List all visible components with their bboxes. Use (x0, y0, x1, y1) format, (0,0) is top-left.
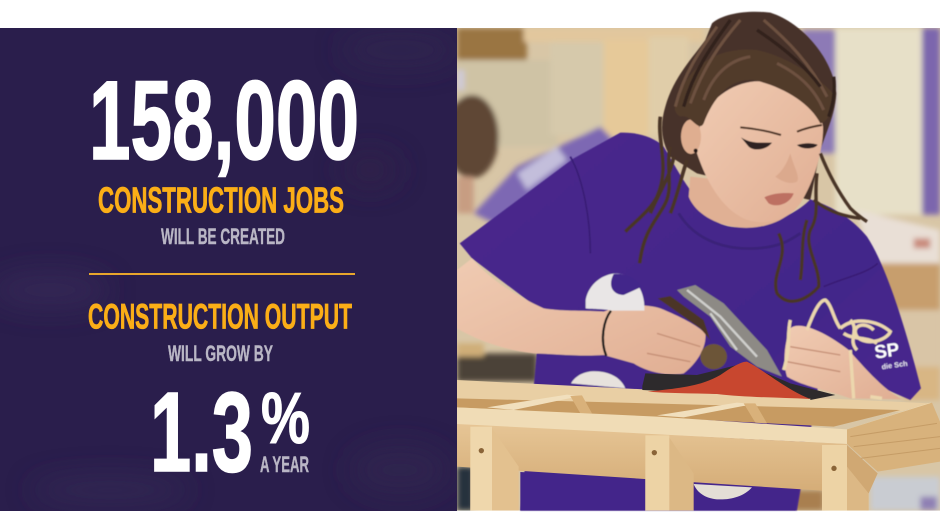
hair strands right (776, 153, 867, 301)
big number: 1.3: 1.3 (150, 369, 253, 495)
figure: woman in purple T-shirt (457, 12, 921, 511)
hand plane body (658, 285, 782, 377)
right hand (785, 326, 902, 399)
plane sole and red side plate (642, 362, 835, 400)
panel: purple overlay (0, 28, 460, 511)
leg three (847, 467, 869, 510)
percent sign: % (261, 379, 310, 459)
left arm (457, 258, 706, 374)
wooden frame (457, 380, 940, 511)
text: will be created: WILL BE CREATED (161, 224, 285, 249)
plane adjuster (700, 344, 727, 369)
leg four end (847, 445, 878, 493)
end grain lines (850, 423, 940, 458)
photo background: blurred workshop (445, 28, 940, 511)
shirt (460, 133, 921, 511)
hair strands left (625, 117, 687, 263)
plane base (642, 363, 835, 400)
heading: construction output: CONSTRUCTION OUTPUT (88, 296, 352, 336)
leg two (645, 435, 694, 511)
hair highlights (675, 20, 827, 110)
wristband (603, 311, 611, 356)
face (697, 81, 823, 222)
shirt logo: lower white circle (571, 371, 625, 388)
purple gap under frame (520, 472, 645, 511)
sleeve text: SP (873, 338, 901, 363)
diagonal brace ends (570, 395, 767, 423)
panel texture (0, 32, 460, 504)
headline number: 158,000: 158,000 (89, 58, 359, 183)
divider line (89, 273, 355, 275)
sleeve print (873, 338, 909, 371)
frame interior (457, 398, 900, 427)
plane highlights (687, 290, 757, 357)
text: will grow by: WILL GROW BY (168, 341, 273, 366)
frame end block (847, 403, 940, 472)
shirt logo: white circle (586, 273, 644, 311)
finger lines (647, 333, 840, 372)
hair back (662, 12, 836, 200)
plane body (677, 285, 782, 377)
wood shavings (784, 300, 890, 398)
photo: woman planing wood (445, 12, 940, 511)
plane red side plate (648, 362, 810, 399)
nose shadow (775, 153, 798, 183)
screw holes (479, 448, 484, 453)
cross braces (487, 395, 754, 417)
white logo under frame (694, 484, 752, 499)
eyebrows (740, 125, 822, 135)
shirt sleeve fold (570, 157, 878, 287)
logo swoosh (611, 274, 642, 295)
ear (681, 119, 701, 154)
T-shirt collar (679, 213, 800, 249)
hair front (675, 50, 835, 126)
sleeve print: die Sch (881, 359, 909, 371)
neck (689, 177, 790, 228)
text: a year: A YEAR (260, 452, 309, 477)
leg one (470, 457, 518, 510)
back rail (457, 380, 930, 412)
eyes (741, 137, 818, 150)
earring (694, 149, 698, 153)
plane handle (658, 296, 710, 340)
front rail top (457, 403, 932, 444)
lips (764, 193, 794, 205)
heading: construction jobs: CONSTRUCTION JOBS (98, 180, 344, 220)
front beam (457, 424, 847, 491)
